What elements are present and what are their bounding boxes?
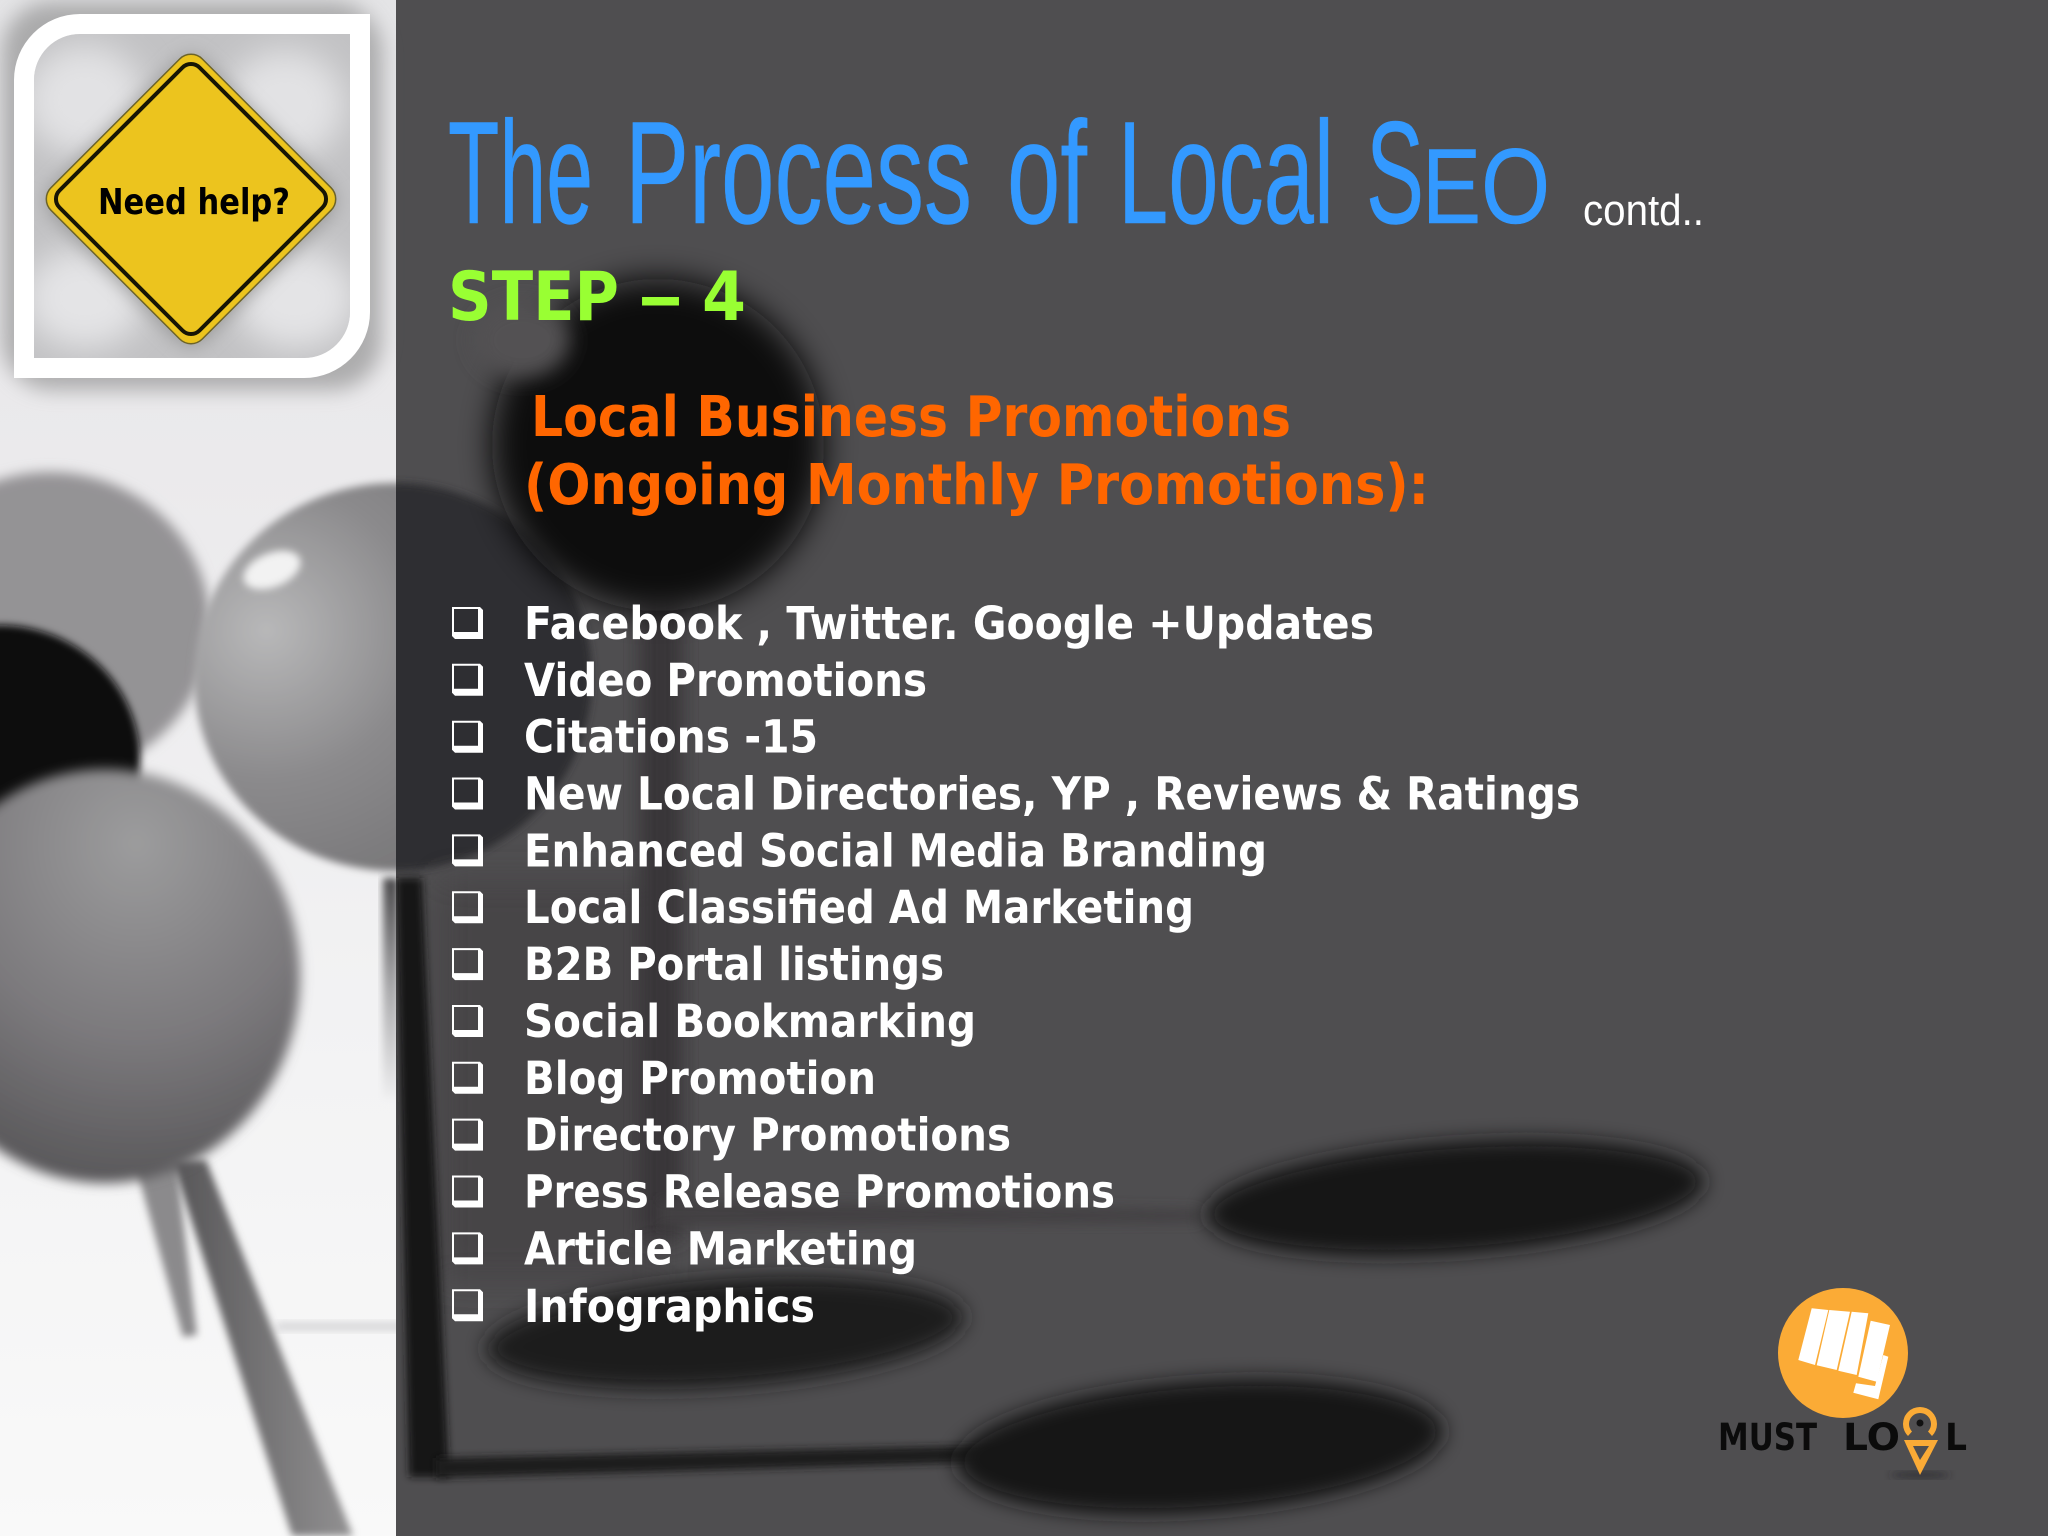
title: Process [625, 91, 972, 254]
logo: must local [1718, 1288, 1967, 1478]
checklist of promotions: Enhanced Social Media Branding [524, 824, 1267, 877]
checklist of promotions: Video Promotions [524, 654, 927, 707]
checklist of promotions: Article Marketing [524, 1222, 917, 1275]
checklist of promotions: Citations -15 [524, 711, 818, 764]
heading: local business promotions: (Ongoing Monthly Promotions): [524, 453, 1429, 518]
title: The [448, 91, 593, 254]
checklist of promotions: Facebook , Twitter. Google +Updates [524, 597, 1374, 650]
checklist of promotions [452, 597, 1580, 1333]
heading: local business promotions [524, 385, 1429, 518]
logo: must local: MUST [1718, 1416, 1818, 1459]
checklist of promotions: Blog Promotion [524, 1052, 876, 1105]
title: S [1366, 91, 1424, 254]
checklist of promotions: Social Bookmarking [524, 995, 976, 1048]
logo: must local: LO [1843, 1416, 1900, 1459]
panel: left photo background with pushpins [0, 0, 396, 1536]
text: contd: contd.. [1583, 186, 1704, 235]
heading: step 4: 4 [702, 258, 746, 337]
icon: need help road sign in frame [2, 2, 382, 390]
title: of [1007, 91, 1087, 254]
heading: step 4: STEP [448, 258, 619, 337]
checklist of promotions: Press Release Promotions [524, 1166, 1115, 1218]
checklist of promotions: B2B Portal listings [524, 938, 944, 991]
title: Local [1118, 91, 1334, 254]
checklist of promotions: Local Classified Ad Marketing [524, 881, 1194, 934]
panel: right dark background with shadows [396, 260, 1714, 1527]
checklist of promotions: Directory Promotions [524, 1109, 1011, 1162]
logo: must local: L [1945, 1416, 1967, 1459]
title: EO [1422, 126, 1550, 246]
checklist of promotions: Infographics [524, 1280, 815, 1333]
heading: step 4: – [637, 258, 684, 337]
icon: need help road sign in frame: Need help? [98, 182, 290, 223]
checklist of promotions: New Local Directories, YP , Reviews & Ratings [524, 768, 1580, 820]
heading: local business promotions: Local Business Promotions [531, 385, 1291, 450]
